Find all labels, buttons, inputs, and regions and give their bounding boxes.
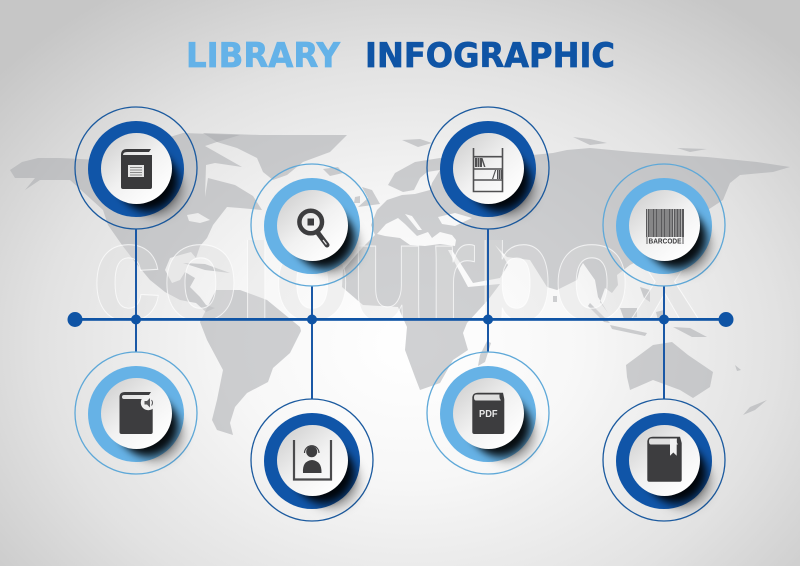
icon: audio book: [120, 392, 156, 434]
icon: barcode: BARCODE: [648, 236, 682, 246]
node: magnifier: [251, 164, 373, 286]
icon: magnifier: [299, 211, 327, 245]
node: librarian: [251, 399, 373, 521]
title: LIBRARY: LIBRARY: [186, 36, 340, 76]
icon: bookmarked book: [647, 437, 682, 482]
icon: librarian: [294, 440, 331, 480]
icon: PDF book: PDF: [479, 408, 498, 420]
watermark text: colourbox: [92, 193, 700, 350]
timeline: [68, 229, 734, 399]
icon: book with label: [121, 149, 152, 189]
map: islands: [183, 137, 767, 415]
node: book with label: [75, 107, 197, 229]
map: North America: [10, 133, 262, 312]
map: Eurasia and Africa: [342, 148, 790, 390]
map: Greenland: [203, 133, 347, 180]
map: South America: [200, 290, 301, 435]
node: PDF book: [427, 352, 549, 474]
node: bookmarked book: [603, 399, 725, 521]
node: barcode: [603, 164, 725, 286]
title: [186, 36, 615, 76]
title: INFOGRAPHIC: INFOGRAPHIC: [365, 36, 615, 76]
world map: [10, 133, 790, 435]
map: Australia: [626, 342, 713, 398]
icon: bookshelf: [474, 148, 502, 192]
node: bookshelf: [427, 107, 549, 229]
node: audio book: [75, 352, 197, 474]
